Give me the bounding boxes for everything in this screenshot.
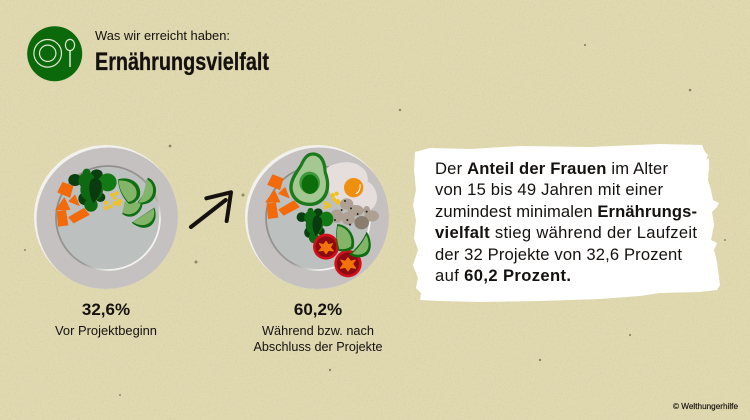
food: tomatoes (313, 234, 362, 277)
food: corn (323, 192, 342, 209)
label: during and after project: Abschluss der Projekte (254, 339, 382, 354)
food: greens (68, 169, 117, 212)
torn white paper (413, 144, 720, 302)
summary copy: von 15 bis 49 Jahren mit einer (435, 180, 663, 199)
summary copy: zumindest minimalen Ernährungs- (435, 202, 697, 221)
label: before project: Vor Projektbeginn (55, 323, 157, 338)
panel: summary text (413, 144, 720, 302)
plate before project (34, 145, 180, 290)
food: corn (104, 191, 122, 210)
label: 32,6%: 32,6% (82, 300, 130, 319)
copyright: © Welthungerhilfe (673, 402, 739, 411)
summary copy: auf 60,2 Prozent. (435, 266, 571, 285)
food: cucumber slices (118, 178, 156, 228)
label: during and after project: Während bzw. nach (262, 323, 374, 338)
summary copy (435, 159, 697, 285)
subtitle: Was wir erreicht haben: (95, 28, 230, 43)
arrow (191, 192, 231, 227)
food: carrots (56, 182, 89, 226)
food: cucumber slices (336, 224, 371, 257)
plate during and after project (245, 145, 390, 290)
label: during and after project (254, 323, 382, 354)
food: carrots (266, 175, 299, 219)
summary copy: der 32 Projekte von 32,6 Prozent (435, 245, 682, 264)
food: avocado (289, 152, 329, 206)
summary copy: Der Anteil der Frauen im Alter (435, 159, 668, 178)
label: 60,2%: 60,2% (294, 300, 342, 319)
food: egg (326, 162, 377, 211)
food: greens (297, 208, 333, 243)
title: Ernährungsvielfalt (95, 48, 270, 76)
summary copy: vielfalt stieg während der Laufzeit (435, 223, 697, 242)
food: mushrooms (330, 198, 379, 229)
icon: plate and spoon (27, 26, 82, 81)
